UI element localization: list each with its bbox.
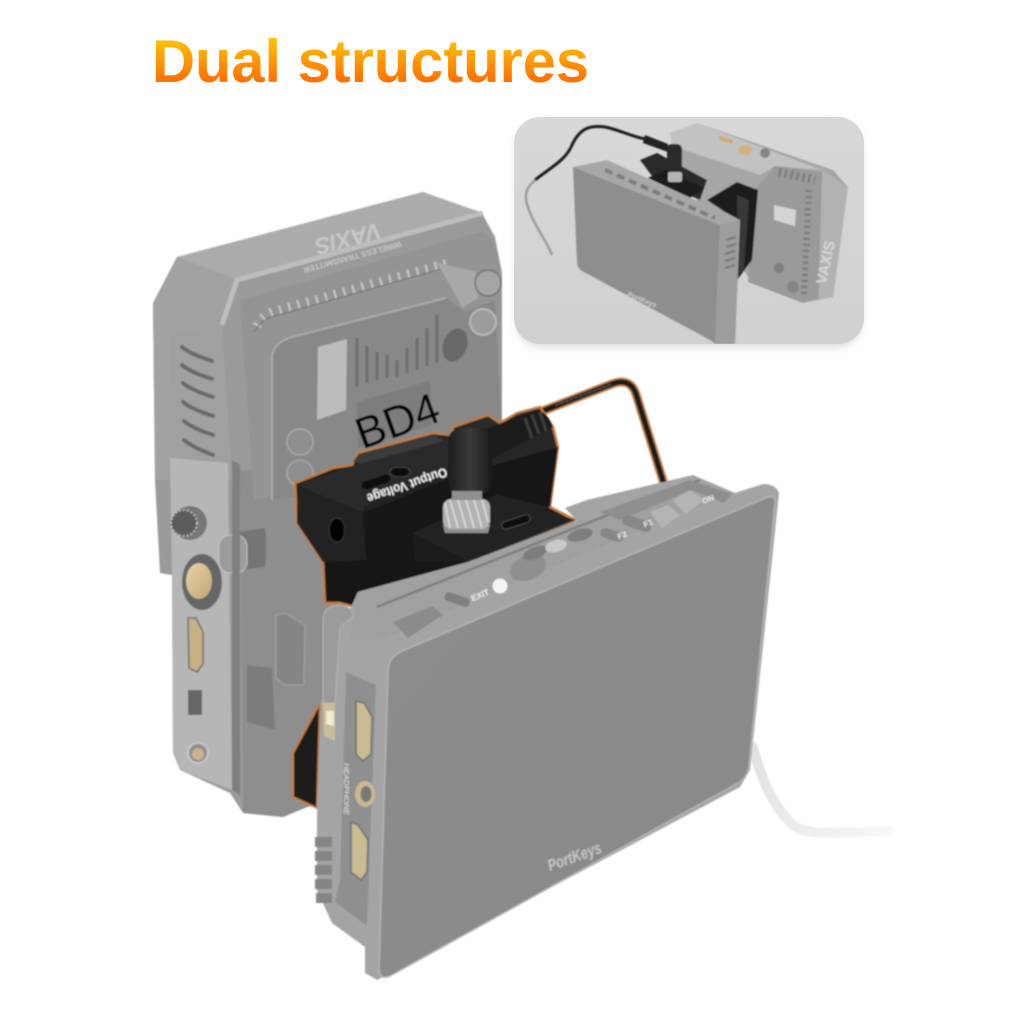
monitor: screen (379, 497, 775, 977)
inset: transmitter logo: VAXIS (813, 239, 839, 286)
inset: monitor: PortKeys (626, 291, 657, 310)
panel: inset photo of the rear mounted setup (514, 117, 864, 348)
connector body (478, 411, 553, 465)
inset: transmitter behind (670, 123, 848, 303)
bracket: front body (350, 447, 558, 592)
monitor: body (317, 475, 779, 980)
monitor: ON label: ON (701, 493, 716, 506)
BD4 bracket lower section (293, 703, 320, 808)
transmitter: logo on the top (295, 213, 403, 274)
BD4 bracket (295, 407, 575, 607)
transmitter: switch (188, 690, 202, 715)
transmitter: hologram sticker (317, 339, 347, 420)
transmitter: gold SDI port (182, 554, 222, 610)
transmitter: top tab and buttons (287, 262, 501, 486)
bracket: hole (390, 467, 410, 477)
bracket: threaded hole (329, 518, 345, 542)
transmitter: ridge ticks (257, 262, 452, 326)
transmitter: HDMI port (188, 618, 203, 672)
monitor: headphone jack (355, 781, 375, 807)
monitor: top holes (521, 526, 594, 563)
transmitter: silver port panel (170, 458, 232, 790)
transmitter: logo on the top: VAXIS (311, 218, 384, 260)
monitor: F2 button and label: F2 (616, 529, 629, 541)
monitor: EXIT label: EXIT (469, 587, 491, 603)
inset: black bracket (640, 135, 758, 280)
monitor: rear ridge shade (350, 480, 735, 640)
transmitter: side rail (232, 460, 240, 795)
connector cylinder (448, 428, 492, 494)
infographic canvas (152, 38, 883, 980)
bracket: Output Voltage label: Output Voltage (365, 465, 449, 506)
monitor: F1 button and label: F1 (642, 517, 655, 529)
monitor: upper HDMI port (356, 701, 372, 761)
transmitter: mounting hole (438, 325, 472, 365)
transmitter: dial (171, 506, 207, 540)
bracket: metal plate (413, 495, 575, 562)
transmitter: upper rim (240, 232, 502, 500)
monitor: lower HDMI port (351, 822, 368, 880)
transmitter: logo plate (357, 381, 432, 448)
bracket: plate slot (500, 514, 532, 530)
transmitter: vent bars (357, 315, 437, 387)
bracket: silhouette (295, 407, 575, 607)
monitor: HEADPHONE label: HEADPHONE (342, 763, 351, 816)
inset: monitor (573, 160, 740, 344)
transmitter: left vents (168, 326, 230, 470)
monitor: joystick chevrons (650, 490, 704, 528)
bracket: side face (297, 485, 366, 562)
monitor: switch (393, 606, 443, 638)
monitor: side recess (335, 672, 376, 926)
white monitor cable (753, 747, 890, 833)
BD4 cable (540, 382, 664, 484)
transmitter: left shoulder (153, 257, 237, 480)
monitor: side grips (315, 842, 332, 898)
monitor: EXIT button (443, 591, 471, 608)
BD4 label: BD4 (349, 384, 446, 459)
monitor: top groove (377, 480, 700, 607)
transmitter: side knob (219, 528, 266, 573)
bracket: slot (360, 474, 392, 490)
bracket: upper rail (353, 435, 447, 465)
transmitter body (153, 192, 502, 817)
title: Dual structures (152, 28, 589, 95)
monitor (315, 475, 779, 980)
monitor: F1 button and label (621, 514, 655, 533)
transmitter: logo on the top: WIRELESS TRANSMITTER (302, 239, 403, 274)
transmitter: inner face (272, 298, 502, 500)
monitor: knob (506, 550, 550, 586)
photo: transmitter, bracket and monitor (153, 192, 890, 980)
transmitter: lower back section (240, 470, 345, 817)
knurled nut (443, 491, 490, 533)
transmitter: top face (177, 192, 483, 280)
bracket: top surface (297, 440, 448, 512)
monitor: PortKeys logo: PortKeys (545, 839, 604, 875)
monitor: F2 button and label (599, 527, 629, 543)
inset: cable (526, 180, 552, 255)
transmitter: power port (188, 743, 208, 763)
antenna (323, 605, 353, 741)
monitor: F-key recess (600, 480, 732, 520)
monitor: indicator light (492, 578, 508, 594)
